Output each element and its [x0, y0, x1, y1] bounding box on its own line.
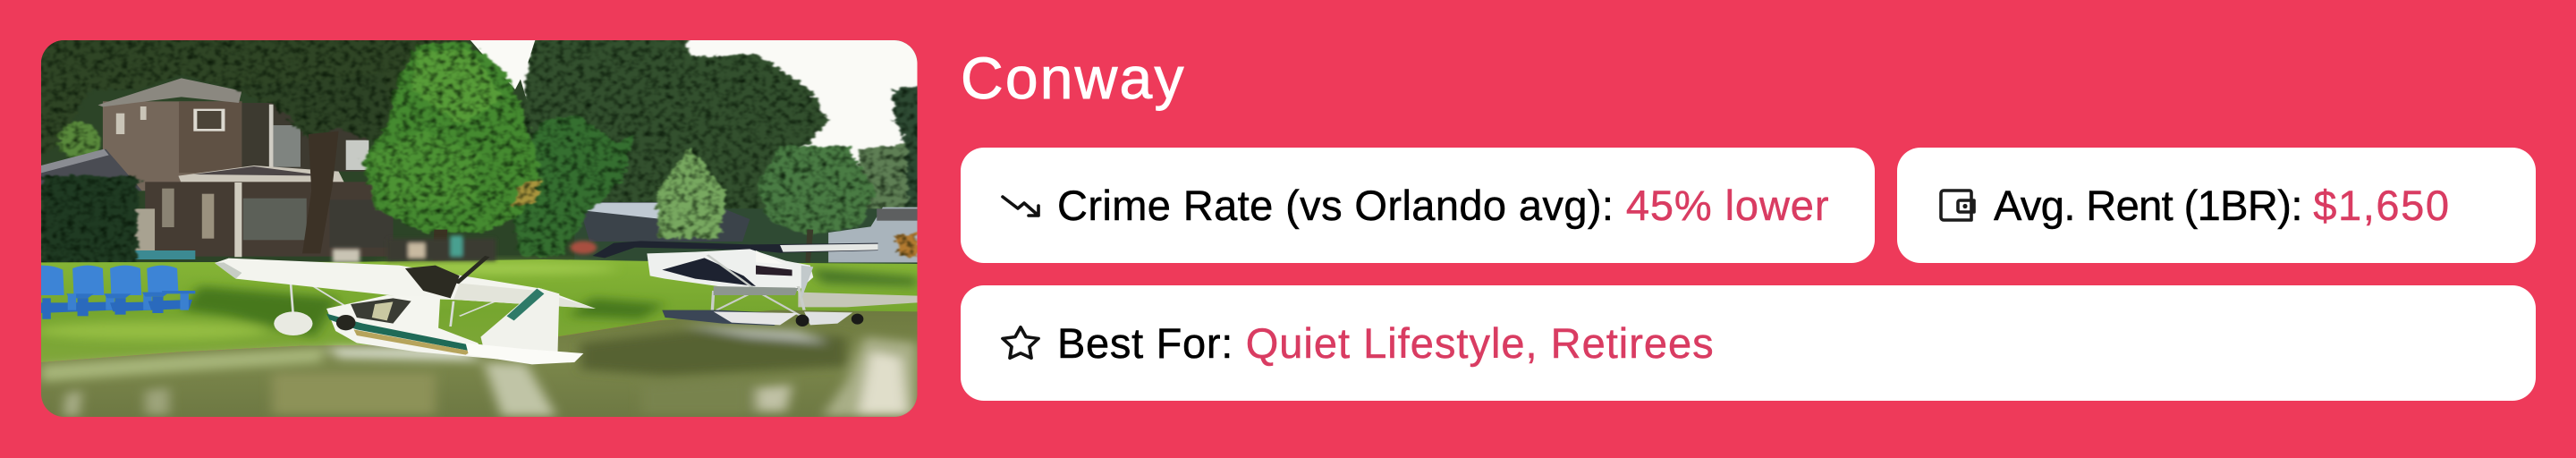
- base foliage: [41, 40, 918, 279]
- background trees: [520, 38, 925, 217]
- icon: trending down arrow: [1001, 195, 1040, 217]
- sky wedge between the trees: [470, 40, 535, 89]
- water reflections: [41, 325, 916, 416]
- card: best for: [961, 285, 2536, 401]
- lawn shadows: [37, 263, 918, 340]
- house: [41, 78, 393, 259]
- seaplane: rear: [592, 241, 878, 327]
- text: rent stat: Avg. Rent (1BR): $1,650: [1994, 182, 2451, 229]
- oak canopy over house: [233, 89, 390, 141]
- walkway: [798, 293, 918, 307]
- card: average rent: [1897, 148, 2536, 263]
- text: best for stat: Best For: Quiet Lifestyle, Retirees: [1057, 319, 1715, 367]
- seaplane: front: [215, 257, 596, 364]
- sky: [521, 40, 918, 168]
- icon: wallet: [1939, 189, 1976, 222]
- text: crime rate stat: Crime Rate (vs Orlando avg): 45% lower: [1057, 182, 1829, 229]
- hedge: [41, 176, 138, 264]
- dark canopy top left: [30, 36, 466, 158]
- central and side trees: [363, 42, 918, 257]
- trunk of dark oak: [302, 131, 339, 253]
- photo: seaplanes on a lake in front of a lakeside house: [41, 40, 918, 417]
- tree trunks: [434, 229, 447, 239]
- back houses right: [574, 202, 918, 266]
- water: [41, 310, 918, 418]
- title: Conway: [961, 45, 1186, 111]
- blue chairs: [41, 266, 195, 319]
- people and picnic table on the lawn: [333, 235, 597, 262]
- card: crime rate: [961, 148, 1875, 263]
- lawn: [41, 259, 918, 362]
- icon: star outline: [1001, 326, 1040, 360]
